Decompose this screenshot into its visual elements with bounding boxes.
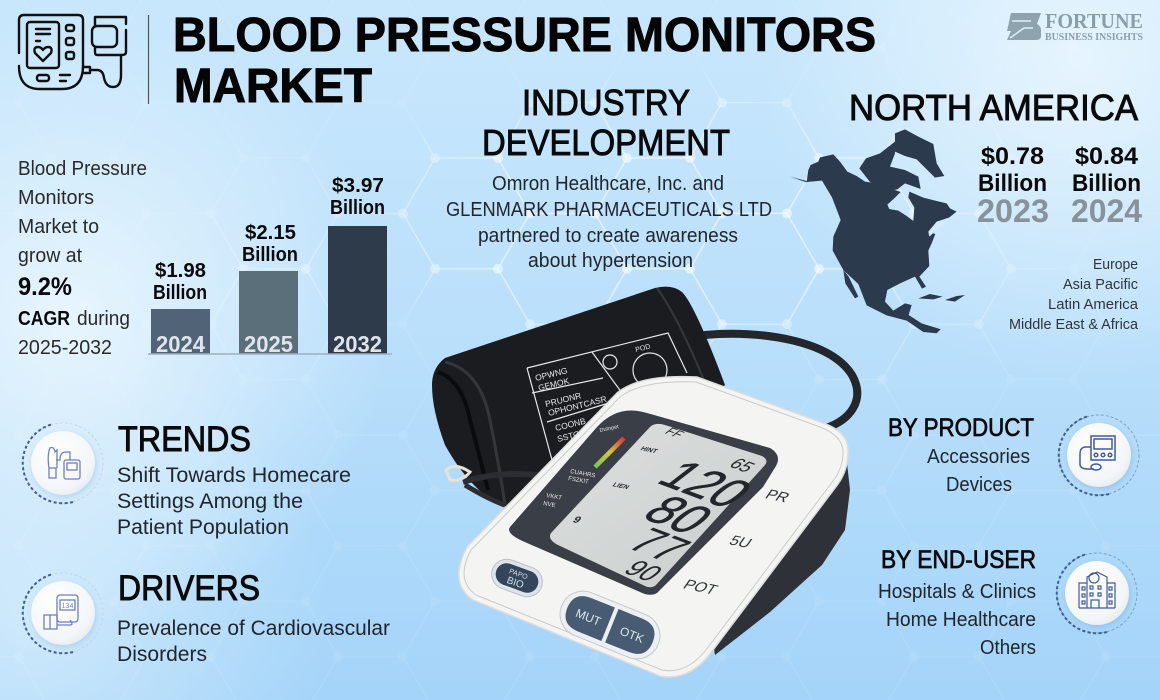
map: North America — [790, 129, 965, 333]
title: BLOOD PRESSURE MONITORS — [173, 9, 876, 62]
lcd digits: 77 — [616, 521, 701, 570]
bar: 2024 — [151, 260, 210, 357]
stat: North America 2024: 2024 — [1071, 193, 1142, 229]
text block: drivers description: Prevalence of Cardiovascular — [117, 617, 390, 640]
text block: industry development description: partnered to create awareness — [478, 225, 738, 247]
text block: end-user segments: Hospitals & Clinics — [878, 581, 1036, 603]
cuff ring and lower tube — [446, 466, 545, 505]
text block: industry development description — [446, 173, 772, 272]
heading: industry development: DEVELOPMENT — [482, 122, 730, 163]
bar: 2032 — [328, 175, 387, 357]
lcd digits: HINT — [639, 446, 659, 455]
bar chart: market size — [148, 175, 392, 357]
text block: CAGR statement: Monitors — [18, 187, 94, 209]
cuff — [432, 287, 725, 507]
heading: industry development: INDUSTRY — [522, 82, 690, 123]
lcd digits: 80 — [631, 487, 726, 542]
icon: product monitor with cuff — [1059, 415, 1139, 495]
text block: drivers description — [117, 617, 390, 666]
text block: other regions: Middle East & Africa — [1009, 317, 1139, 333]
lcd digits: FF — [661, 425, 688, 440]
icon: hospital building — [1057, 553, 1137, 633]
text block: CAGR statement: Market to — [18, 216, 99, 238]
bar: 2024: $1.98 — [155, 260, 206, 282]
device printed labels: CUAHRS — [570, 469, 596, 479]
device dark side — [700, 445, 850, 655]
bar: 2024: Billion — [153, 282, 207, 304]
bar: 2025 — [239, 222, 298, 357]
logo: Fortune Business Insights: FORTUNE — [1045, 9, 1143, 33]
memory button: PAPO — [508, 568, 529, 581]
device printed labels: 5U — [726, 533, 755, 551]
bar: 2025: $2.15 — [245, 222, 296, 244]
stat: North America 2023: Billion — [978, 170, 1047, 197]
text block: industry development description: Omron Healthcare, Inc. and — [492, 173, 724, 195]
device printed labels: VKKT — [546, 493, 562, 502]
heading: drivers: DRIVERS — [118, 569, 260, 608]
screen bezel — [509, 410, 778, 595]
start and mode buttons: MUT — [574, 606, 604, 629]
icon: trends hand and monitor — [23, 423, 103, 503]
bar: 2032: 2032 — [333, 331, 382, 357]
start and mode buttons: OTK — [618, 624, 646, 646]
cuff: GEMOK — [537, 376, 571, 393]
heading: trends: TRENDS — [118, 420, 251, 459]
device printed labels: PR — [762, 487, 792, 506]
heading: north america: NORTH AMERICA — [849, 87, 1138, 128]
bar: 2025: Billion — [242, 244, 298, 266]
icon: blood pressure monitor header icon — [19, 15, 126, 89]
text block: trends description: Settings Among the — [117, 490, 303, 513]
cuff: COONB — [554, 416, 587, 433]
cuff: POD — [635, 343, 651, 354]
text block: trends description: Shift Towards Homecare — [117, 464, 351, 487]
text block: end-user segments: Home Healthcare — [886, 609, 1036, 631]
panel: by end-user — [878, 546, 1137, 659]
text block: other regions: Asia Pacific — [1063, 277, 1138, 293]
text block: end-user segments — [878, 581, 1036, 659]
heading: by end-user: BY END-USER — [881, 546, 1036, 574]
panel: by product — [888, 414, 1139, 496]
lcd digits: LIEN — [611, 482, 630, 491]
memory button — [487, 555, 547, 601]
stat: North America 2024: $0.84 — [1075, 143, 1139, 170]
title: MARKET — [174, 60, 372, 113]
logo: Fortune Business Insights — [1007, 9, 1143, 43]
stat: North America 2023: $0.78 — [981, 143, 1044, 170]
panel: drivers — [23, 569, 390, 666]
text block: product segments — [927, 446, 1030, 496]
text block: CAGR statement: during — [77, 308, 130, 330]
bar: 2032: $3.97 — [332, 175, 384, 197]
header divider — [148, 15, 150, 104]
lcd digits: 90 — [617, 556, 670, 586]
lcd digits — [570, 425, 765, 586]
illustration: blood pressure monitor device — [432, 287, 857, 677]
start and mode buttons — [553, 584, 667, 666]
cuff: SSTO — [556, 429, 581, 444]
text block: drivers description: Disorders — [117, 643, 207, 666]
text block: CAGR statement: Blood Pressure — [18, 158, 147, 180]
memory button: BIO — [505, 575, 525, 591]
text block: end-user segments: Others — [980, 637, 1036, 659]
title — [173, 9, 876, 113]
stat: North America 2024: Billion — [1072, 170, 1141, 197]
bar: 2024: 2024 — [156, 331, 205, 357]
text block: trends description — [117, 464, 351, 539]
lcd panel — [550, 424, 766, 587]
heading: industry development — [482, 82, 730, 163]
stat: North America 2024 — [1071, 143, 1142, 229]
icon: drivers digital monitor — [23, 573, 103, 653]
text block: industry development description: about hypertension — [528, 250, 693, 272]
stat: North America 2023 — [977, 143, 1049, 229]
text block: trends description: Patient Population — [117, 516, 289, 539]
lcd digits: 65 — [725, 455, 760, 475]
text block: CAGR statement: grow at — [18, 245, 82, 267]
device printed labels — [543, 424, 792, 598]
lcd digits: 9 — [570, 515, 583, 526]
text block: CAGR statement: 2025-2032 — [18, 337, 112, 359]
bar: 2032: Billion — [330, 197, 385, 219]
text block: CAGR statement — [18, 158, 147, 359]
heading: by product: BY PRODUCT — [888, 414, 1034, 442]
icon: drivers digital monitor: 134 — [62, 603, 73, 610]
text block: product segments: Devices — [946, 474, 1012, 496]
stat: North America 2023: 2023 — [977, 193, 1049, 229]
logo: Fortune Business Insights: BUSINESS INSIGHTS — [1045, 32, 1143, 43]
device printed labels: Dutnpet — [599, 424, 620, 434]
text block: product segments: Accessories — [927, 446, 1030, 468]
text block: CAGR statement: 9.2% — [18, 273, 72, 301]
device printed labels: NVE — [543, 501, 556, 509]
device printed labels: POT — [680, 577, 721, 598]
cuff tube — [705, 334, 857, 428]
panel: trends — [23, 420, 351, 539]
meter bar — [595, 438, 624, 467]
cuff: OPHONTCASR — [547, 394, 608, 418]
lcd digits: 120 — [646, 452, 765, 516]
cuff: PRUONR — [544, 390, 582, 409]
device printed labels: FSZKIT — [568, 476, 589, 486]
text block: CAGR statement: CAGR — [18, 308, 70, 330]
bar: 2025: 2025 — [244, 331, 293, 357]
text block: other regions: Latin America — [1048, 297, 1139, 313]
text block: industry development description: GLENMARK PHARMACEUTICALS LTD — [446, 199, 772, 221]
device white face — [459, 377, 848, 677]
text block: other regions: Europe — [1093, 257, 1138, 273]
cuff: OPWNG — [534, 365, 569, 383]
text block: other regions — [1009, 257, 1139, 333]
